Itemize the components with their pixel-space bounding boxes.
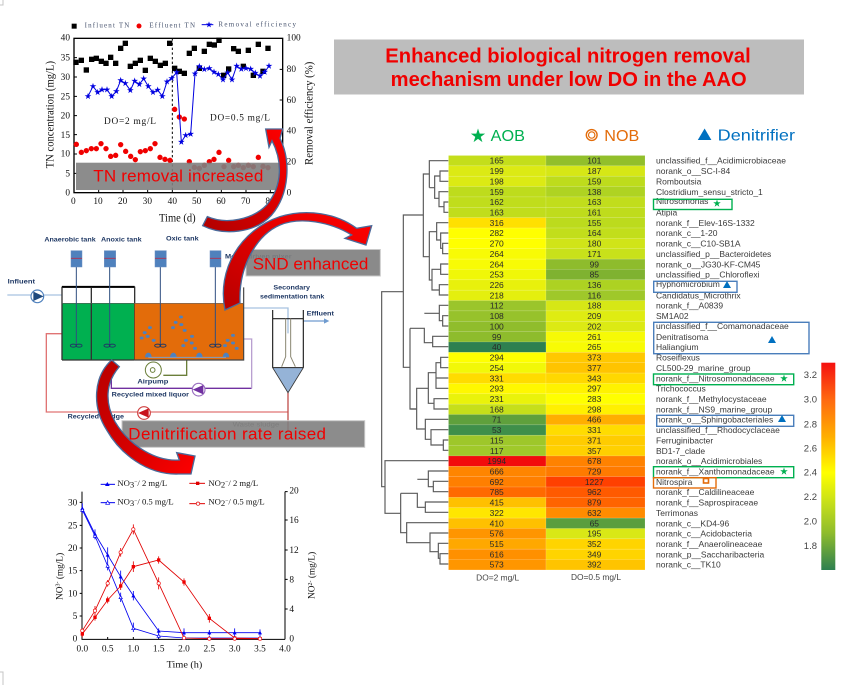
left axis labels: 30 [61,73,70,83]
sludge pump [138,407,150,419]
heatmap: genera abundance at DO=2 and DO=0.5 mg/L: norank_f__A0839 [656,301,723,311]
heatmap: genera abundance at DO=2 and DO=0.5 mg/L: BD1-7_clade [656,446,705,456]
oxic tank [135,287,244,360]
right axis labels [289,487,299,645]
heatmap: genera abundance at DO=2 and DO=0.5 mg/L: 136 [587,280,602,290]
heatmap: genera abundance at DO=2 and DO=0.5 mg/L: 410 [490,518,504,528]
dissolved oxygen labels: DO=2 mg/L [104,117,156,127]
heatmap: genera abundance at DO=2 and DO=0.5 mg/L: 115 [490,435,504,445]
left axis labels: 15 [61,131,70,141]
heatmap: genera abundance at DO=2 and DO=0.5 mg/L: 349 [587,549,602,559]
chart: TN concentration and removal efficiency [44,21,316,225]
callout: Denitrification rate raised [122,421,365,447]
influent TN series [76,40,268,75]
tank labels: Effluent [307,312,334,318]
right axis labels: 12 [289,546,299,556]
heatmap: genera abundance at DO=2 and DO=0.5 mg/L: 231 [490,394,504,404]
left axis labels [61,34,70,198]
x axis labels: 0.0 [76,644,88,654]
heatmap: genera abundance at DO=2 and DO=0.5 mg/L: CL500-29_marine_group [656,363,751,373]
heatmap colour scale: 2.0 [804,516,817,528]
tank labels: Influent [8,279,35,285]
heatmap: genera abundance at DO=2 and DO=0.5 mg/L: 171 [587,249,602,259]
heatmap: genera abundance at DO=2 and DO=0.5 mg/L: norank_f__Caldilineaceae [656,487,755,497]
heatmap: genera abundance at DO=2 and DO=0.5 mg/L: DO=0.5 mg/L [571,572,621,582]
heatmap: genera abundance at DO=2 and DO=0.5 mg/L: 352 [587,539,602,549]
heatmap: genera abundance at DO=2 and DO=0.5 mg/L: norank_c__TK10 [656,560,721,570]
heatmap: genera abundance at DO=2 and DO=0.5 mg/L: 198 [490,176,504,186]
chart legend: 2 [221,479,225,489]
x axis labels: 20 [118,197,128,207]
heatmap: genera abundance at DO=2 and DO=0.5 mg/L: 283 [587,394,602,404]
heatmap: genera abundance at DO=2 and DO=0.5 mg/L: norank_f__Methylocystaceae [656,394,767,404]
dissolved oxygen labels: DO=0.5 mg/L [210,114,270,124]
x axis labels: 60 [216,197,226,207]
heatmap: genera abundance at DO=2 and DO=0.5 mg/L: unclassified_f__Acidimicrobiaceae [656,156,786,166]
x axis labels: 3.0 [229,644,241,654]
right axis labels: 20 [287,157,296,167]
heatmap: genera abundance at DO=2 and DO=0.5 mg/L: 515 [490,539,504,549]
heatmap: genera abundance at DO=2 and DO=0.5 mg/L: 159 [490,187,504,197]
axis titles [44,61,316,225]
heatmap: genera abundance at DO=2 and DO=0.5 mg/L: 155 [587,218,602,228]
heatmap: genera abundance at DO=2 and DO=0.5 mg/L: 879 [587,498,602,508]
chart legend: NO [208,497,221,507]
tank labels: Oxic tank [166,236,199,242]
heatmap: genera abundance at DO=2 and DO=0.5 mg/L: 40 [492,342,502,352]
heatmap: genera abundance at DO=2 and DO=0.5 mg/L: 202 [587,321,602,331]
recycle and flow pipes [7,295,325,431]
right axis labels: 0 [287,188,292,198]
chart legend: − [225,498,228,504]
right axis labels: 0 [289,635,294,645]
heatmap: genera abundance at DO=2 and DO=0.5 mg/L: Denitratisoma [656,332,709,342]
heatmap: genera abundance at DO=2 and DO=0.5 mg/L: 163 [587,197,602,207]
left axis labels: 5 [73,612,78,622]
heatmap: genera abundance at DO=2 and DO=0.5 mg/L: 99 [590,259,599,269]
heatmap: genera abundance at DO=2 and DO=0.5 mg/L: 85 [590,270,599,280]
left axis labels: 10 [61,150,70,160]
chart legend: Influent TN [85,22,129,30]
heatmap colour scale: 2.8 [804,420,817,430]
aeration diffusers [145,353,229,357]
x axis labels: 2.5 [203,644,215,654]
heatmap: genera abundance at DO=2 and DO=0.5 mg/L: 331 [587,425,602,435]
heatmap: genera abundance at DO=2 and DO=0.5 mg/L: norank_f__Nitrosomonadaceae [656,373,775,383]
heatmap: genera abundance at DO=2 and DO=0.5 mg/L: 357 [587,446,602,456]
heatmap colour scale: 2.2 [804,492,817,503]
x axis labels: 0.5 [102,644,114,654]
tank labels: Secondary [273,285,311,291]
heatmap: genera abundance at DO=2 and DO=0.5 mg/L: 100 [490,321,504,331]
chart legend: 3 [130,498,134,508]
heatmap: genera abundance at DO=2 and DO=0.5 mg/L: 322 [490,508,504,518]
heatmap: genera abundance at DO=2 and DO=0.5 mg/L: 264 [490,259,504,269]
right axis labels: 8 [289,575,294,585]
heatmap: genera abundance at DO=2 and DO=0.5 mg/L: 270 [490,239,504,249]
functional group legend: Denitrifier [718,128,796,145]
axis titles: Time (h) [167,659,202,670]
heatmap: genera abundance at DO=2 and DO=0.5 mg/L: 253 [490,270,504,280]
chart legend: / 2 mg/L [228,478,258,488]
heatmap: genera abundance at DO=2 and DO=0.5 mg/L: 218 [490,290,504,300]
left axis labels: 40 [61,34,70,44]
heatmap: genera abundance at DO=2 and DO=0.5 mg/L: Romboutsia [656,176,702,186]
chart legend: − [134,498,137,504]
left axis labels: 15 [68,567,78,577]
x axis labels: 3.5 [254,644,266,654]
right axis labels: 16 [289,516,299,526]
axis titles: Removal efficiency (%) [304,61,316,165]
dendrogram: lower clusters [385,357,448,564]
heatmap: genera abundance at DO=2 and DO=0.5 mg/L: 187 [587,166,602,176]
chart legend: NO [208,478,221,488]
tank labels [8,236,334,429]
axis titles: 3 [56,584,62,587]
axis titles: Time (d) [159,213,196,225]
heatmap: genera abundance at DO=2 and DO=0.5 mg/L: 1994 [487,456,506,466]
curved arrow: process to denitrification [97,360,195,474]
heatmap: genera abundance at DO=2 and DO=0.5 mg/L: 116 [588,290,601,300]
chart legend: NO [117,497,130,507]
chart legend: 3 [130,479,134,489]
right axis labels: 40 [287,127,296,137]
functional group legend: AOB [491,128,525,145]
heatmap: genera abundance at DO=2 and DO=0.5 mg/L: 101 [587,156,602,166]
left axis labels: 25 [61,93,70,103]
tank labels: Waste sludge [233,423,280,429]
heatmap: genera abundance at DO=2 and DO=0.5 mg/L: 226 [490,280,504,290]
heatmap: genera abundance at DO=2 and DO=0.5 mg/L: norank_c__Acidobacteria [656,529,752,539]
axes and ticks [80,492,288,639]
heatmap: genera abundance at DO=2 and DO=0.5 mg/L: Trichococcus [656,384,706,394]
heatmap: genera abundance at DO=2 and DO=0.5 mg/L: 392 [587,560,602,570]
x axis labels: 1.0 [127,644,139,654]
tank labels: Motor-driven mixer [225,254,292,260]
axis titles: - [56,582,62,584]
chart legend: NO [117,478,130,488]
chart legend: / 2 mg/L [137,478,167,488]
heatmap: genera abundance at DO=2 and DO=0.5 mg/L: 117 [490,446,504,456]
heatmap: genera abundance at DO=2 and DO=0.5 mg/L: 297 [587,384,602,394]
highlighted taxa boxes and group markers [654,199,809,488]
heatmap: genera abundance at DO=2 and DO=0.5 mg/L: Candidatus_Microthrix [656,290,741,300]
heatmap: genera abundance at DO=2 and DO=0.5 mg/L: norank_c__KD4-96 [656,518,730,528]
heatmap: genera abundance at DO=2 and DO=0.5 mg/L: 576 [490,529,504,539]
left axis labels [68,498,78,645]
heatmap: genera abundance at DO=2 and DO=0.5 mg/L: 99 [492,332,502,342]
aeration bubbles [140,315,239,350]
heatmap: genera abundance at DO=2 and DO=0.5 mg/L: 316 [490,218,504,228]
chart legend: − [134,479,137,485]
x axis labels: 10 [93,197,103,207]
functional group legend: NOB [604,128,639,145]
heatmap: genera abundance at DO=2 and DO=0.5 mg/L: unclassified_f__Comamonadaceae [656,321,789,331]
axis titles [54,552,318,670]
heatmap: genera abundance at DO=2 and DO=0.5 mg/L: Clostridium_sensu_stricto_1 [656,187,763,197]
heatmap: genera abundance at DO=2 and DO=0.5 mg/L: 165 [490,156,504,166]
x axis labels [76,644,291,654]
heatmap: genera abundance at DO=2 and DO=0.5 mg/L: norank_f__NS9_marine_group [656,404,773,414]
heatmap: genera abundance at DO=2 and DO=0.5 mg/L: Haliangium [656,342,699,352]
tank labels: Recycled sludge [68,415,125,421]
title banner [334,40,804,94]
chart legend: / 0.5 mg/L [228,497,265,507]
heatmap: genera abundance at DO=2 and DO=0.5 mg/L: 112 [490,301,504,311]
right axis labels: 80 [287,65,296,75]
curved arrow: TN removal to process [203,129,287,232]
anaerobic and anoxic tanks [62,287,135,361]
heatmap: genera abundance at DO=2 and DO=0.5 mg/L: 180 [587,239,602,249]
heatmap: genera abundance at DO=2 and DO=0.5 mg/L: 678 [587,456,602,466]
heatmap: genera abundance at DO=2 and DO=0.5 mg/L: Nitrosomonas [656,196,708,206]
left axis labels: 0 [73,635,78,645]
heatmap: genera abundance at DO=2 and DO=0.5 mg/L: norank_o__JG30-KF-CM45 [656,259,761,269]
heatmap: genera abundance at DO=2 and DO=0.5 mg/L: 785 [490,487,504,497]
callout: Denitrification rate raised: Denitrification rate raised [128,424,326,443]
tank labels: sedimentation tank [260,294,325,300]
heatmap: genera abundance at DO=2 and DO=0.5 mg/L: 53 [492,425,502,435]
heatmap: genera abundance at DO=2 and DO=0.5 mg/L: 108 [490,311,504,321]
chart legend [72,21,296,30]
chart: nitrate and nitrite profiles [54,478,318,670]
heatmap: genera abundance at DO=2 and DO=0.5 mg/L: 159 [587,176,602,186]
heatmap: genera abundance at DO=2 and DO=0.5 mg/L: norank_f__Xanthomonadaceae [656,466,775,476]
callout: SND enhanced: SND enhanced [253,254,368,273]
heatmap: genera abundance at DO=2 and DO=0.5 mg/L: Hyphomicrobium [656,279,720,289]
heatmap: genera abundance at DO=2 and DO=0.5 mg/L: 264 [490,249,504,259]
chart legend: 2 [221,498,225,508]
axis titles: - [308,581,314,583]
heatmap: genera abundance at DO=2 and DO=0.5 mg/L: Atipia [656,208,678,218]
functional group legend [471,128,796,145]
influent pump [31,290,44,303]
left axis labels: 25 [68,521,78,531]
heatmap: genera abundance at DO=2 and DO=0.5 mg/L: 168 [490,404,504,414]
heatmap: genera abundance at DO=2 and DO=0.5 mg/L: 371 [587,435,602,445]
heatmap: genera abundance at DO=2 and DO=0.5 mg/L: Nitrospira [656,477,693,487]
right axis labels: 60 [287,96,296,106]
right axis labels: 100 [287,34,301,44]
heatmap: genera abundance at DO=2 and DO=0.5 mg/L: 164 [587,228,602,238]
left axis labels: 35 [61,53,70,63]
dendrogram: upper clusters [382,161,448,487]
heatmap: genera abundance at DO=2 and DO=0.5 mg/L: DO=2 mg/L [476,572,520,582]
heatmap: genera abundance at DO=2 and DO=0.5 mg/L: 162 [490,197,504,207]
heatmap: genera abundance at DO=2 and DO=0.5 mg/L: norank_c__C10-SB1A [656,239,741,249]
heatmap: genera abundance at DO=2 and DO=0.5 mg/L: 632 [587,508,602,518]
heatmap: genera abundance at DO=2 and DO=0.5 mg/L: norank_c__1-20 [656,228,718,238]
left axis labels: 10 [68,589,78,599]
heatmap: genera abundance at DO=2 and DO=0.5 mg/L: unclassified_p__Chloroflexi [656,270,760,280]
heatmap: genera abundance at DO=2 and DO=0.5 mg/L: 573 [490,560,504,570]
heatmap colour scale: 3.2 [804,370,817,381]
heatmap: genera abundance at DO=2 and DO=0.5 mg/L: unclassified_f__Rhodocyclaceae [656,425,780,435]
heatmap: genera abundance at DO=2 and DO=0.5 mg/L: 138 [587,187,602,197]
heatmap: genera abundance at DO=2 and DO=0.5 mg/L: 377 [587,363,602,373]
x axis labels: 40 [168,197,177,207]
x axis labels: 0 [71,197,76,207]
heatmap: genera abundance at DO=2 and DO=0.5 mg/L: 692 [490,477,504,487]
chart legend: Effluent TN [149,22,195,30]
axis titles: TN concentration (mg/L) [44,61,56,168]
heatmap: genera abundance at DO=2 and DO=0.5 mg/L: Terrimonas [656,508,698,518]
curved arrow: process to microbial community [223,213,372,310]
heatmap: genera abundance at DO=2 and DO=0.5 mg/L [448,156,789,582]
heatmap colour scale: 1.8 [804,541,817,552]
NO2- at 0.5 mg/L [82,529,260,639]
heatmap: genera abundance at DO=2 and DO=0.5 mg/L: 294 [490,353,504,363]
heatmap: genera abundance at DO=2 and DO=0.5 mg/L: 282 [490,228,504,238]
chart legend: / 0.5 mg/L [137,497,174,507]
axis titles: (mg/L) [54,553,65,582]
right axis labels: 4 [289,605,294,615]
heatmap: genera abundance at DO=2 and DO=0.5 mg/L: 195 [587,529,602,539]
heatmap colour scale: 3.0 [804,394,817,406]
dissolved oxygen labels [104,114,270,127]
heatmap: genera abundance at DO=2 and DO=0.5 mg/L: 254 [490,363,504,373]
NO3- at 2 mg/L [82,508,260,633]
left axis labels: 20 [61,112,70,122]
heatmap: genera abundance at DO=2 and DO=0.5 mg/L: 729 [587,466,602,476]
heatmap: genera abundance at DO=2 and DO=0.5 mg/L: 65 [590,518,599,528]
heatmap: genera abundance at DO=2 and DO=0.5 mg/L: 71 [492,415,502,425]
heatmap: genera abundance at DO=2 and DO=0.5 mg/L: Roseiflexus [656,353,700,363]
axes frame and ticks [74,38,283,193]
right axis labels [287,34,301,198]
heatmap: genera abundance at DO=2 and DO=0.5 mg/L: norank_o__SC-I-84 [656,166,730,176]
heatmap: genera abundance at DO=2 and DO=0.5 mg/L: norank_f__Anaerolineaceae [656,539,763,549]
left axis labels: 5 [65,169,70,179]
tank labels: Anoxic tank [101,237,142,243]
heatmap: genera abundance at DO=2 and DO=0.5 mg/L: 343 [587,373,602,383]
x axis labels: 50 [192,197,202,207]
title banner: Enhanced biological nitrogen removal [385,45,751,67]
axis titles: (mg/L) [307,552,318,581]
heatmap: genera abundance at DO=2 and DO=0.5 mg/L: norank_f__Saprospiraceae [656,498,758,508]
heatmap colour scale: 2.6 [804,444,817,454]
frame corner fragments [0,0,3,685]
callout: TN removal increased: TN removal increased [93,167,263,186]
axis titles: NO [308,586,318,599]
effluent arrowhead [324,318,329,324]
heatmap: genera abundance at DO=2 and DO=0.5 mg/L: 1227 [585,477,604,487]
air pump [145,362,161,378]
heatmap: genera abundance at DO=2 and DO=0.5 mg/L: norank_o__Acidimicrobiales [656,456,762,466]
chart legend: − [225,479,228,485]
tank labels: Anaerobic tank [44,237,96,243]
removal efficiency series [88,66,269,142]
heatmap: genera abundance at DO=2 and DO=0.5 mg/L: 199 [490,166,504,176]
x axis labels: 1.5 [153,644,165,654]
heatmap colour scale [804,363,835,570]
heatmap: genera abundance at DO=2 and DO=0.5 mg/L: 616 [490,549,504,559]
heatmap colour scale: 2.4 [804,468,817,478]
chart legend: Removal efficiency [218,21,296,29]
heatmap: genera abundance at DO=2 and DO=0.5 mg/L: 373 [587,353,602,363]
heatmap: genera abundance at DO=2 and DO=0.5 mg/L: 962 [587,487,602,497]
heatmap: genera abundance at DO=2 and DO=0.5 mg/L: 265 [587,342,602,352]
left axis labels: 0 [65,188,70,198]
AAO process diagram [7,236,334,431]
heatmap: genera abundance at DO=2 and DO=0.5 mg/L: 188 [587,301,602,311]
heatmap: genera abundance at DO=2 and DO=0.5 mg/L: unclassified_p__Bacteroidetes [656,249,771,259]
right axis labels: 20 [289,487,299,497]
callout: SND enhanced [246,250,380,276]
effluent TN series [76,109,268,168]
heatmap: genera abundance at DO=2 and DO=0.5 mg/L: norank_f__Elev-16S-1332 [656,218,755,228]
axis titles: 2 [308,583,314,586]
x axis labels: 80 [265,197,275,207]
left axis labels: 30 [68,498,78,508]
axis titles: NO [55,587,65,600]
heatmap: genera abundance at DO=2 and DO=0.5 mg/L: 209 [587,311,602,321]
heatmap: genera abundance at DO=2 and DO=0.5 mg/L: 666 [490,466,504,476]
callout: TN removal increased [76,163,283,190]
chart legend [101,478,265,508]
heatmap: genera abundance at DO=2 and DO=0.5 mg/L: 331 [490,373,504,383]
heatmap: genera abundance at DO=2 and DO=0.5 mg/L: norank_o__Sphingobacteriales [656,415,773,425]
x axis labels: 4.0 [279,644,291,654]
NO3- at 0.5 mg/L [82,510,260,638]
tank labels: Recycled mixed liquor [112,393,190,399]
heatmap: genera abundance at DO=2 and DO=0.5 mg/L: 298 [587,404,602,414]
mixed liquor pump [192,383,205,396]
heatmap: genera abundance at DO=2 and DO=0.5 mg/L: 163 [490,208,504,218]
heatmap: genera abundance at DO=2 and DO=0.5 mg/L: Ferruginibacter [656,435,713,445]
x axis labels: 30 [143,197,152,207]
heatmap: genera abundance at DO=2 and DO=0.5 mg/L: 261 [587,332,602,342]
error bars [82,503,260,638]
heatmap: genera abundance at DO=2 and DO=0.5 mg/L: 415 [490,498,504,508]
heatmap: genera abundance at DO=2 and DO=0.5 mg/L: 293 [490,384,504,394]
NO2- at 2 mg/L [82,560,260,639]
heatmap: genera abundance at DO=2 and DO=0.5 mg/L: 161 [587,208,602,218]
heatmap: genera abundance at DO=2 and DO=0.5 mg/L: 466 [587,415,602,425]
x axis labels: 70 [241,197,251,207]
motor-driven mixers [70,251,221,347]
x axis labels: 2.0 [178,644,190,654]
title banner: mechanism under low DO in the AAO [391,69,747,91]
secondary sedimentation tank [273,310,303,393]
x axis labels [71,197,275,207]
heatmap: genera abundance at DO=2 and DO=0.5 mg/L: SM1A02 [656,311,689,321]
heatmap: genera abundance at DO=2 and DO=0.5 mg/L: norank_p__Saccharibacteria [656,549,764,559]
left axis labels: 20 [68,544,78,554]
tank labels: Airpump [137,380,169,386]
